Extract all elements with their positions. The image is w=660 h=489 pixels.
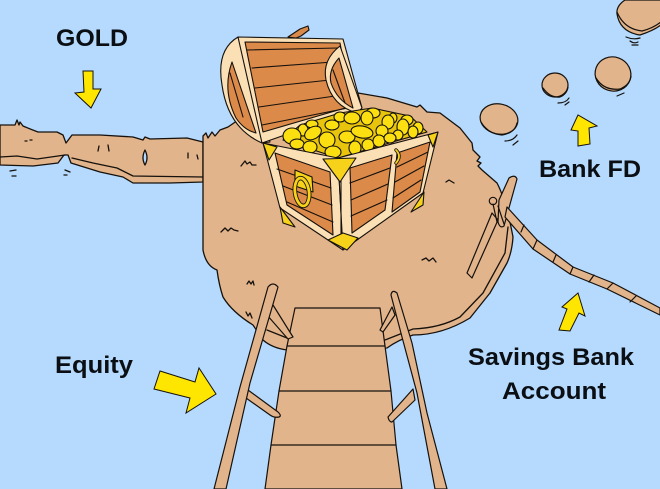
- treasure chest: [221, 26, 438, 250]
- chest gold corners: [263, 132, 438, 250]
- left dock posts: [267, 305, 293, 339]
- Equity label: Equity: [55, 352, 134, 379]
- gold coins: [283, 108, 427, 158]
- dock planks: [265, 308, 402, 489]
- arrow: right to dock: [154, 368, 216, 413]
- flying coin top right: [617, 0, 660, 45]
- Savings Bank Account label: Savings Bank: [468, 344, 635, 371]
- flying coin middle: [542, 73, 569, 105]
- chest body: [263, 132, 438, 250]
- arrow: up to rope: [559, 293, 585, 331]
- wooden dock: [214, 284, 447, 489]
- flying coin right: [590, 52, 636, 96]
- GOLD label: GOLD: [56, 25, 128, 52]
- arrow: down to gold path: [75, 71, 101, 108]
- right dock posts: [380, 307, 395, 332]
- arrow: up to coins: [571, 115, 597, 146]
- flying coin left: [477, 100, 521, 145]
- island: [203, 93, 513, 350]
- left land strip: gold path: [0, 120, 203, 183]
- rope: [505, 207, 660, 315]
- chest lock and ring: [295, 170, 313, 192]
- mooring post: [467, 213, 498, 278]
- chest lid: [221, 37, 362, 143]
- mooring post and rope: [467, 176, 660, 315]
- Account label line: Account: [502, 378, 606, 405]
- chest handle behind lid: [288, 26, 309, 38]
- Bank FD label: Bank FD: [539, 156, 641, 183]
